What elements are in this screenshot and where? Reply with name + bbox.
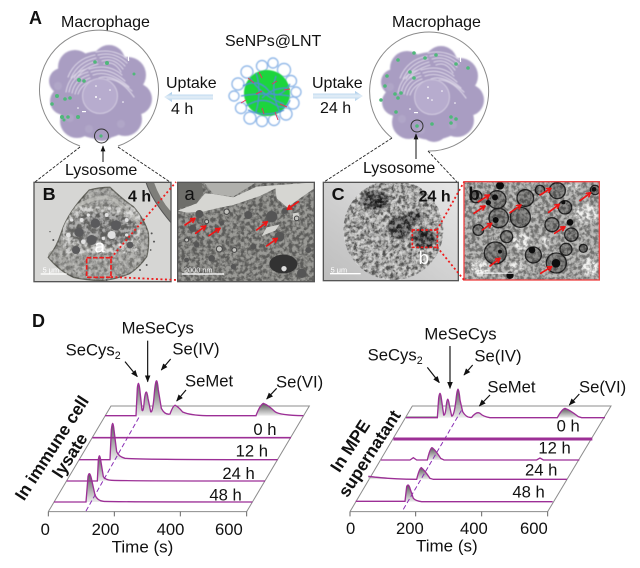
- species labels: SeMet: [185, 372, 234, 391]
- time labels: [209, 420, 276, 505]
- species labels: 2: [115, 350, 121, 362]
- dark aggregates and vesicles: [184, 208, 311, 278]
- x axis labels: [41, 520, 243, 556]
- red arrows a: [185, 202, 298, 246]
- green nanoparticles left: [50, 60, 136, 138]
- x ticks: [48, 512, 247, 516]
- red arrows b: [474, 188, 591, 273]
- peak fills: [368, 389, 582, 502]
- scale bar a: 2000 nm: [184, 265, 213, 274]
- x axis labels: 600: [215, 520, 243, 539]
- nanoparticle SeNPs@LNT: [225, 33, 321, 126]
- uptake 4 h label and arrow: Uptake: [166, 75, 217, 92]
- red dotted zoom lines C to b: [437, 182, 464, 280]
- small lobe of cell: [48, 250, 52, 256]
- time labels: 48 h: [209, 486, 242, 505]
- scale bar: 5 μm: [43, 266, 59, 275]
- panel b: TEM inset 24 h: [464, 182, 600, 280]
- light extracellular channel: [178, 182, 314, 213]
- heading: macrophage right: Macrophage: [392, 14, 481, 31]
- species labels: SeCys: [66, 341, 115, 360]
- pale gaps: [470, 183, 598, 276]
- polymer strands: [241, 73, 290, 114]
- scale bar C: 5 μm: [331, 265, 347, 274]
- frame a: [178, 182, 314, 282]
- lysosome ring left: [94, 129, 108, 143]
- label B: B: [43, 184, 56, 204]
- time labels: 12 h: [236, 442, 268, 461]
- arrow left: [164, 92, 213, 102]
- species labels: [66, 318, 323, 391]
- x axis labels: 200: [92, 520, 119, 539]
- time labels: [512, 417, 580, 501]
- cell outline left: [40, 30, 159, 146]
- purple traces: [54, 381, 303, 502]
- neighbouring cell corner: [146, 182, 171, 223]
- cell body right: [381, 46, 484, 142]
- uptake 24 h label and arrow: Uptake: [312, 75, 363, 92]
- label b: b: [468, 183, 480, 204]
- time labels: 24 h: [525, 461, 557, 480]
- species labels: SeMet: [487, 377, 536, 396]
- x axis labels: Time (s): [416, 537, 478, 556]
- macrophage 24 h: [363, 14, 489, 177]
- axis frame: [350, 406, 611, 512]
- scale bar b: [477, 272, 513, 275]
- pale rim of cell: [68, 198, 142, 228]
- species arrows: [427, 346, 579, 406]
- heading: macrophage left: Macrophage: [61, 14, 150, 31]
- panel label A: A: [29, 8, 42, 28]
- species labels: Se(VI): [276, 372, 323, 391]
- dark patches: [361, 190, 436, 248]
- dark cytoplasm: [67, 212, 137, 247]
- species labels: MeSeCys: [424, 324, 497, 343]
- species labels: MeSeCys: [122, 318, 194, 337]
- x axis labels: Time (s): [112, 537, 173, 556]
- peak fills: [86, 381, 287, 502]
- time labels: 24 h: [222, 464, 255, 483]
- dashed retention guide: [403, 410, 462, 509]
- arrow right: [313, 91, 363, 101]
- lysosome arrow left: [102, 146, 104, 162]
- uptake 24 h label and arrow: [312, 75, 363, 117]
- frame b: [464, 182, 599, 280]
- frame: [34, 182, 171, 282]
- lysosome label right: Lysosome: [363, 160, 435, 177]
- species labels: [368, 324, 626, 397]
- cell body C: [344, 181, 443, 279]
- lysosome ring right: [411, 120, 423, 132]
- species labels: 2: [417, 355, 423, 367]
- debris specks: [49, 231, 155, 281]
- zoom guide lines: [35, 138, 457, 182]
- uptake 24 h label and arrow: 24 h: [320, 100, 351, 117]
- macrophage 4 h: [40, 14, 159, 179]
- x axis labels: 400: [157, 520, 184, 539]
- vesicles: [470, 183, 600, 273]
- species labels: Se(VI): [579, 378, 626, 397]
- label b white: b: [419, 247, 429, 268]
- frame C: [323, 182, 458, 281]
- species arrows: [125, 341, 277, 401]
- red dotted zoom lines B to a: [111, 182, 177, 280]
- species labels: SeCys: [368, 346, 417, 365]
- time labels: 12 h: [538, 438, 571, 457]
- chart: MPE supernatant: [326, 324, 626, 556]
- x axis labels: 0: [41, 520, 50, 539]
- purple traces: [356, 389, 605, 502]
- x axis labels: 600: [520, 519, 548, 538]
- inset region box C: [412, 230, 437, 247]
- y axis title: In immune cell: [11, 392, 93, 504]
- species labels: Se(IV): [474, 347, 522, 366]
- panel B: TEM 4 h: [34, 182, 171, 282]
- green nanoparticles right: [379, 51, 470, 128]
- uptake 4 h label and arrow: 4 h: [171, 101, 193, 118]
- panel C: TEM 24 h: [323, 181, 458, 281]
- time labels: 0 h: [557, 417, 580, 436]
- x axis labels: [346, 519, 548, 556]
- nanoparticle title: SeNPs@LNT: [225, 33, 321, 50]
- chart: immune cell lysate: [11, 318, 323, 556]
- y axis title: lysate: [48, 429, 92, 482]
- cell outline right: [370, 32, 489, 151]
- label a white: a: [94, 235, 105, 256]
- selenium core: [244, 70, 290, 116]
- label 4 h: 4 h: [128, 189, 151, 206]
- species labels: Se(IV): [172, 339, 220, 358]
- label a: a: [184, 183, 195, 204]
- x ticks: [350, 512, 548, 516]
- cell body left: [49, 45, 152, 141]
- x axis labels: 400: [460, 519, 488, 538]
- lysosome arrow right: [415, 134, 417, 159]
- cell body: [48, 187, 149, 281]
- y axis title: In MPE: [326, 416, 374, 476]
- y axis title: supernatant: [334, 406, 405, 501]
- panel label D: D: [32, 311, 45, 331]
- x axis labels: 0: [346, 519, 355, 538]
- time labels: 0 h: [253, 420, 276, 439]
- label 24 h: 24 h: [419, 189, 451, 206]
- panel a: TEM inset 4 h: [178, 182, 314, 282]
- nanoparticle lobes: [229, 58, 301, 126]
- lysosome label left: Lysosome: [65, 162, 137, 179]
- time labels: 48 h: [512, 482, 545, 501]
- label C: C: [332, 184, 345, 204]
- axis frame: [48, 406, 309, 512]
- inset region box: [87, 258, 111, 277]
- x axis labels: 200: [396, 519, 424, 538]
- dashed retention guide: [86, 417, 139, 511]
- uptake 4 h label and arrow: [164, 75, 217, 118]
- red strands: [241, 72, 290, 120]
- panel A: SeNPs uptake schematic: [29, 8, 489, 182]
